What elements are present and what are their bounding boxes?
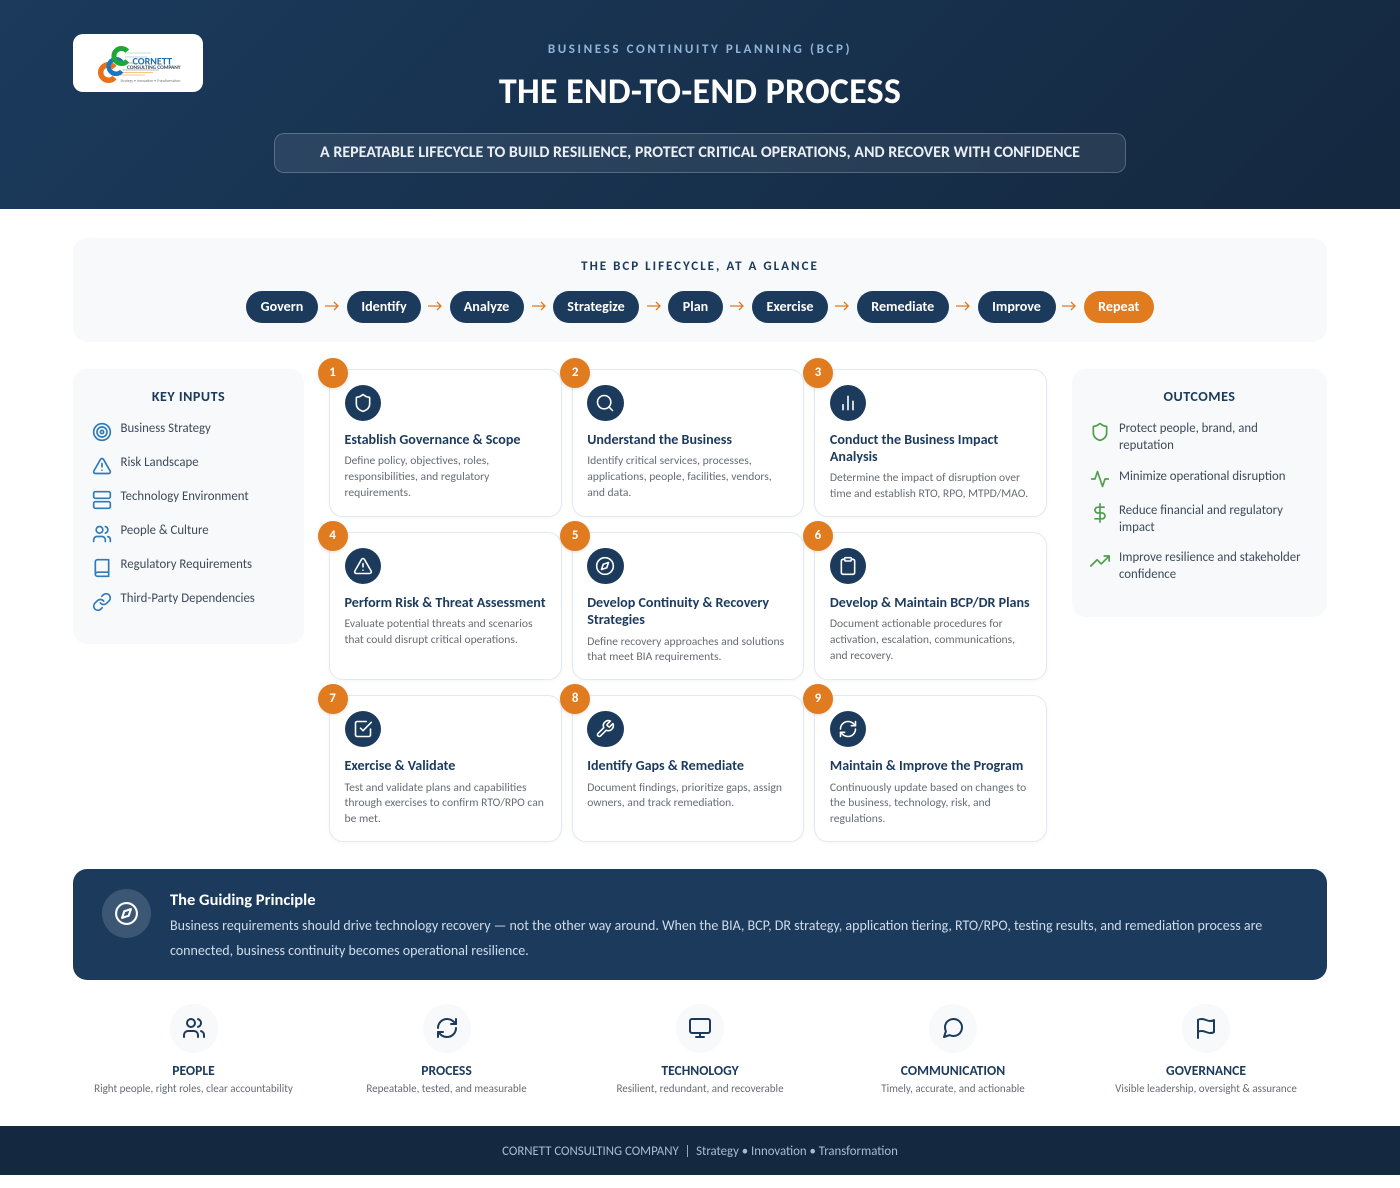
pillar: communication	[881, 1018, 1025, 1095]
pillar: governance	[1115, 1018, 1297, 1095]
card text	[344, 780, 544, 826]
pillar text: Timely, accurate, and actionable	[881, 1082, 1025, 1095]
outcome: improve: confidence	[1119, 567, 1176, 582]
pillar: process	[366, 1018, 527, 1095]
icon: process	[422, 1004, 471, 1052]
icon: shield	[344, 385, 381, 421]
card text	[344, 617, 533, 647]
step number 1: 1	[329, 364, 336, 380]
company logo	[73, 34, 203, 92]
card 4: risk assessment	[329, 532, 562, 680]
pillar label: COMMUNICATION	[901, 1062, 1005, 1079]
outcome: improve: Improve resilience and stakeholder	[1119, 550, 1301, 565]
outcome: improve	[1090, 550, 1301, 582]
icon: clipboard	[830, 548, 866, 584]
outcome: protect: Protect people, brand, and	[1119, 421, 1258, 436]
card title: Perform Risk & Threat Assessment	[344, 594, 546, 610]
icon: flag	[1182, 1004, 1230, 1052]
card text: Determine the impact of disruption over	[830, 471, 1020, 485]
step number 4	[318, 520, 348, 550]
pillar label: TECHNOLOGY	[661, 1062, 739, 1079]
input: people and culture	[92, 523, 209, 542]
lifecycle flow: Strategize	[567, 298, 625, 315]
card text	[344, 454, 490, 500]
step number 2	[560, 358, 590, 388]
card title: Develop Continuity & Recovery	[587, 594, 769, 610]
step number 6: 6	[815, 528, 821, 542]
footer	[0, 1126, 1400, 1175]
step number 3: 3	[815, 364, 821, 380]
company logo: CORNETT	[132, 54, 172, 68]
pillar text: Resilient, redundant, and recoverable	[616, 1082, 784, 1095]
card 8: remediate	[572, 695, 804, 842]
card 7: exercise	[329, 695, 562, 842]
card text: Test and validate plans and capabilities	[344, 780, 527, 794]
card text: time and establish RTO, RPO, MTPD/MAO.	[830, 487, 1028, 501]
outcome: protect	[1092, 421, 1258, 453]
card title: Strategies	[587, 610, 645, 628]
lifecycle flow: Improve	[992, 298, 1041, 315]
icon: people	[170, 1004, 218, 1052]
input: people and culture: People & Culture	[120, 523, 209, 538]
step number 8	[560, 684, 590, 714]
step number 3	[803, 358, 833, 388]
card text: Continuously update based on changes to	[830, 780, 1026, 794]
card title: Develop & Maintain BCP/DR Plans	[830, 594, 1030, 610]
header banner	[0, 0, 1400, 209]
lifecycle flow: Plan	[683, 298, 708, 315]
icon: bar chart	[830, 385, 866, 421]
card text: Identify critical services, processes,	[587, 454, 752, 468]
card title: Maintain & Improve the Program	[830, 756, 1023, 774]
card title: Exercise & Validate	[344, 756, 455, 774]
step number 6	[803, 520, 833, 550]
icon: compass	[587, 548, 624, 584]
icon: search	[587, 385, 624, 421]
icon: refresh	[830, 711, 866, 747]
outcome: minimize	[1090, 469, 1285, 488]
card text: and recovery.	[830, 648, 893, 662]
step number 5: 5	[572, 528, 578, 542]
card text	[830, 780, 1026, 826]
card text	[830, 617, 1015, 662]
card title: Establish Governance & Scope	[344, 430, 520, 448]
icon: compass	[102, 888, 151, 938]
guiding principle text: connected, business continuity becomes operational resilience.	[170, 942, 529, 959]
lifecycle flow: Identify	[361, 298, 407, 315]
input: technology environment	[92, 489, 249, 510]
lifecycle flow: Repeat	[1098, 298, 1139, 315]
card text	[830, 471, 1028, 501]
card text: activation, escalation, communications,	[830, 633, 1015, 647]
key inputs heading: KEY INPUTS	[152, 388, 225, 405]
company logo: Strategy • Innovation • Transformation	[120, 79, 180, 84]
lifecycle flow: Analyze	[464, 298, 509, 315]
input: technology environment: Technology Environment	[120, 489, 249, 504]
icon: monitor	[676, 1004, 724, 1052]
card text: the business, technology, risk, and	[830, 796, 991, 810]
step number 9: 9	[815, 690, 821, 706]
step number 4: 4	[329, 528, 336, 542]
input: business strategy: Business Strategy	[120, 421, 211, 436]
input: regulatory requirements	[94, 557, 252, 578]
lifecycle flow: Remediate	[871, 298, 934, 315]
step number 2: 2	[572, 364, 578, 380]
card text: Document actionable procedures for	[830, 617, 1003, 631]
panel: key inputs	[73, 369, 304, 644]
card title: Understand the Business	[587, 430, 732, 448]
card text	[587, 780, 782, 810]
input: regulatory requirements: Regulatory Requirements	[120, 557, 252, 572]
input: business strategy	[92, 421, 211, 442]
eyebrow heading: BUSINESS CONTINUITY PLANNING (BCP)	[548, 42, 852, 56]
lifecycle flow: Exercise	[767, 298, 813, 315]
pillar label: PROCESS	[421, 1062, 472, 1079]
card text	[587, 635, 784, 664]
outcome: reduce	[1094, 503, 1283, 535]
pillar text: Repeatable, tested, and measurable	[366, 1082, 527, 1095]
input: third-party dependencies	[92, 591, 255, 612]
pillar text: Visible leadership, oversight & assurance	[1115, 1082, 1297, 1095]
card title: Conduct the Business Impact	[830, 430, 998, 448]
card 1: governance	[329, 369, 562, 517]
card text: be met.	[344, 812, 381, 826]
card 5: strategies	[572, 532, 804, 680]
guiding principle text: Business requirements should drive technology recovery — not the other way around. When the BIA, BCP, DR strategy, application tiering, RTO/RPO, testing results, and remediation process are	[170, 917, 1262, 934]
icon: check square	[344, 711, 381, 747]
footer: CORNETT CONSULTING COMPANY | Strategy • Innovation • Transformation	[502, 1144, 898, 1159]
pillar: technology	[616, 1018, 784, 1095]
card text: responsibilities, and regulatory	[344, 470, 489, 484]
icon: message	[929, 1004, 977, 1052]
card title: Analysis	[830, 448, 878, 464]
icon: wrench	[587, 711, 624, 747]
card text: owners, and track remediation.	[587, 796, 734, 810]
subtitle banner: A REPEATABLE LIFECYCLE TO BUILD RESILIENCE, PROTECT CRITICAL OPERATIONS, AND RECOVER WITH CONFIDENCE	[320, 143, 1080, 162]
pillar label: GOVERNANCE	[1166, 1062, 1246, 1079]
panel: guiding principle	[73, 869, 1327, 980]
card 2: understand	[572, 369, 804, 517]
pillar: people	[94, 1018, 293, 1095]
card title: Identify Gaps & Remediate	[587, 756, 744, 774]
card title	[587, 594, 769, 628]
card text: and data.	[587, 486, 631, 500]
lifecycle heading: THE BCP LIFECYCLE, AT A GLANCE	[581, 258, 819, 274]
outcomes heading: OUTCOMES	[1164, 388, 1235, 405]
step number 7: 7	[329, 690, 336, 706]
icon: warning	[344, 548, 381, 584]
input: risk landscape	[92, 455, 199, 474]
input: third-party dependencies: Third-Party Dependencies	[120, 591, 255, 606]
title: THE END-TO-END PROCESS	[499, 69, 901, 113]
card text: Evaluate potential threats and scenarios	[344, 617, 533, 631]
card text: through exercises to confirm RTO/RPO can	[344, 796, 544, 810]
pillar label: PEOPLE	[172, 1062, 215, 1079]
card text	[587, 454, 772, 500]
pillar text: Right people, right roles, clear accountability	[94, 1082, 293, 1095]
guiding principle text	[170, 917, 1262, 959]
outcome: reduce: Reduce financial and regulatory	[1119, 503, 1283, 518]
card 6: plans	[814, 532, 1047, 680]
company logo: CONSULTING COMPANY	[127, 65, 181, 71]
input: risk landscape: Risk Landscape	[120, 455, 199, 470]
step number 7	[318, 684, 348, 714]
card text: that meet BIA requirements.	[587, 650, 721, 664]
outcome: minimize: Minimize operational disruption	[1119, 469, 1285, 484]
outcome: reduce: impact	[1119, 520, 1155, 535]
card 3: business impact analysis	[814, 369, 1047, 517]
step number 5	[560, 520, 590, 550]
panel: lifecycle at a glance	[73, 238, 1327, 342]
card text: regulations.	[830, 812, 885, 826]
step number 9	[803, 684, 833, 714]
panel: outcomes	[1072, 369, 1327, 617]
card text: Define recovery approaches and solutions	[587, 635, 784, 649]
step number 1	[318, 358, 348, 388]
subtitle banner	[274, 133, 1126, 173]
card text: that could disrupt critical operations.	[344, 633, 518, 647]
card text: Define policy, objectives, roles,	[344, 454, 489, 468]
lifecycle flow: Govern	[261, 298, 303, 315]
guiding principle heading: The Guiding Principle	[170, 890, 316, 910]
lifecycle flow	[246, 291, 1154, 323]
card text: applications, people, facilities, vendors,	[587, 470, 772, 484]
outcome: protect: reputation	[1119, 438, 1174, 453]
card text: Document findings, prioritize gaps, assign	[587, 780, 782, 794]
card 9: maintain	[814, 695, 1047, 842]
card text: requirements.	[344, 486, 411, 500]
step number 8: 8	[572, 690, 578, 706]
card title	[830, 430, 998, 464]
